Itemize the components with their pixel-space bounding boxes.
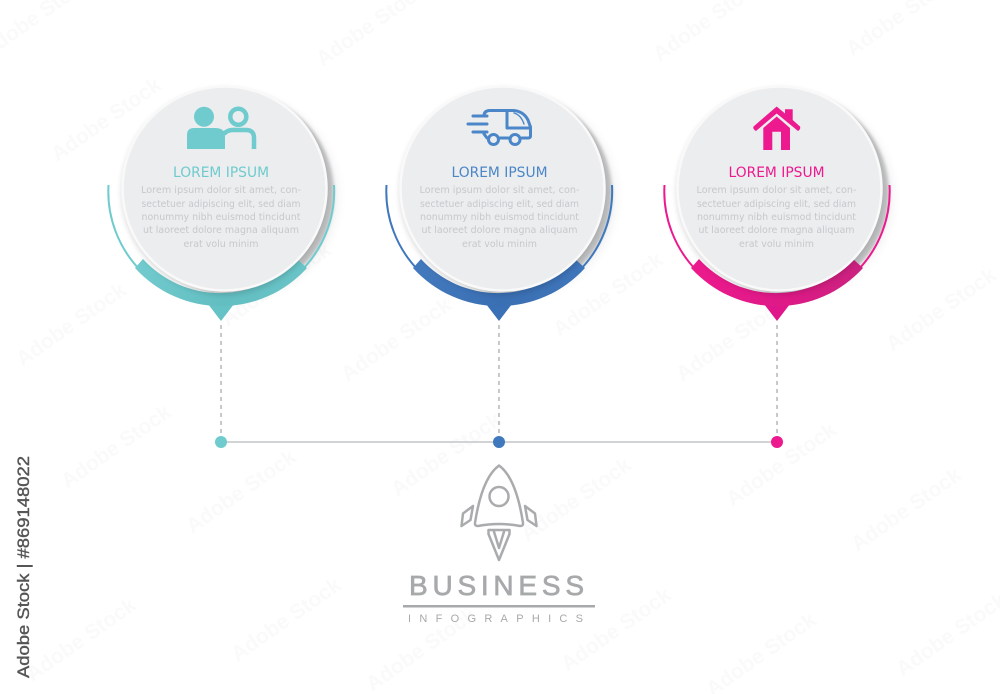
watermark pattern: Adobe Stock <box>337 293 456 386</box>
body text: Lorem ipsum dolor sit amet, con- <box>420 185 580 196</box>
thin arc <box>108 185 334 271</box>
watermark pattern: Adobe Stock <box>517 453 636 546</box>
watermark pattern: Adobe Stock <box>672 293 791 386</box>
heading: LOREM IPSUM <box>728 165 824 181</box>
body text: erat volu minim <box>739 239 814 250</box>
disc <box>400 86 604 290</box>
panel: step 3 pink <box>664 86 893 321</box>
panel: step 2 blue <box>386 86 616 321</box>
body text <box>141 185 301 250</box>
watermark pattern: Adobe Stock <box>217 238 336 331</box>
body text: ut laoreet dolore magna aliquam <box>422 225 578 236</box>
icon: people <box>187 107 254 149</box>
body text: nonummy nibh euismod tincidunt <box>697 212 856 223</box>
watermark pattern: Adobe Stock <box>387 408 506 501</box>
watermark pattern: Adobe Stock <box>12 278 131 371</box>
pointer <box>764 304 790 321</box>
disc shadow <box>122 88 328 294</box>
shadow <box>408 91 616 298</box>
shadow <box>130 91 338 298</box>
watermark pattern: Adobe Stock <box>22 593 141 686</box>
body text: Lorem ipsum dolor sit amet, con- <box>696 185 856 196</box>
watermark pattern: Adobe Stock <box>549 248 668 341</box>
thin arc <box>386 185 612 271</box>
timeline connector <box>215 325 783 448</box>
watermark pattern: Adobe Stock <box>882 263 1000 356</box>
body text: Lorem ipsum dolor sit amet, con- <box>141 185 301 196</box>
watermark pattern: Adobe Stock <box>227 573 346 666</box>
body text: sectetuer adipiscing elit, sed diam <box>420 199 579 210</box>
watermark pattern: Adobe Stock <box>57 400 176 493</box>
body text: sectetuer adipiscing elit, sed diam <box>697 199 856 210</box>
title: business infographics: INFOGRAPHICS <box>408 613 583 625</box>
disc <box>122 86 326 290</box>
watermark pattern: Adobe Stock <box>182 445 301 538</box>
band <box>135 259 307 306</box>
body text <box>696 185 856 250</box>
watermark pattern: Adobe Stock <box>47 73 166 166</box>
body text: ut laoreet dolore magna aliquam <box>698 225 854 236</box>
body text: sectetuer adipiscing elit, sed diam <box>142 199 300 210</box>
watermark pattern: Adobe Stock <box>847 463 966 556</box>
disc <box>678 86 882 290</box>
thin arc <box>664 185 890 271</box>
heading: LOREM IPSUM <box>452 165 548 181</box>
heading: LOREM IPSUM <box>173 165 269 181</box>
band <box>413 259 585 306</box>
body text: erat volu minim <box>184 239 258 250</box>
watermark pattern: Adobe Stock <box>557 583 676 676</box>
body text: nonummy nibh euismod tincidunt <box>142 212 301 223</box>
watermark pattern: Adobe Stock <box>362 603 481 694</box>
watermark pattern: Adobe Stock <box>722 418 841 511</box>
title: business infographics: BUSINESS <box>409 570 584 601</box>
disc shadow <box>676 88 882 294</box>
icon: delivery truck <box>468 110 530 144</box>
panel: step 1 teal <box>108 86 338 321</box>
body text: nonummy nibh euismod tincidunt <box>420 212 579 223</box>
icon: rocket <box>462 466 536 560</box>
body text: ut laoreet dolore magna aliquam <box>143 225 299 236</box>
shadow <box>685 91 893 298</box>
disc shadow <box>400 88 606 294</box>
icon: house <box>753 106 800 150</box>
band <box>691 259 863 306</box>
pointer <box>486 304 512 321</box>
body text: erat volu minim <box>462 239 537 250</box>
title: business infographics <box>403 570 595 625</box>
body text <box>420 185 580 250</box>
stock id label: Adobe Stock | #869148022 <box>14 456 33 678</box>
pointer <box>208 304 234 321</box>
